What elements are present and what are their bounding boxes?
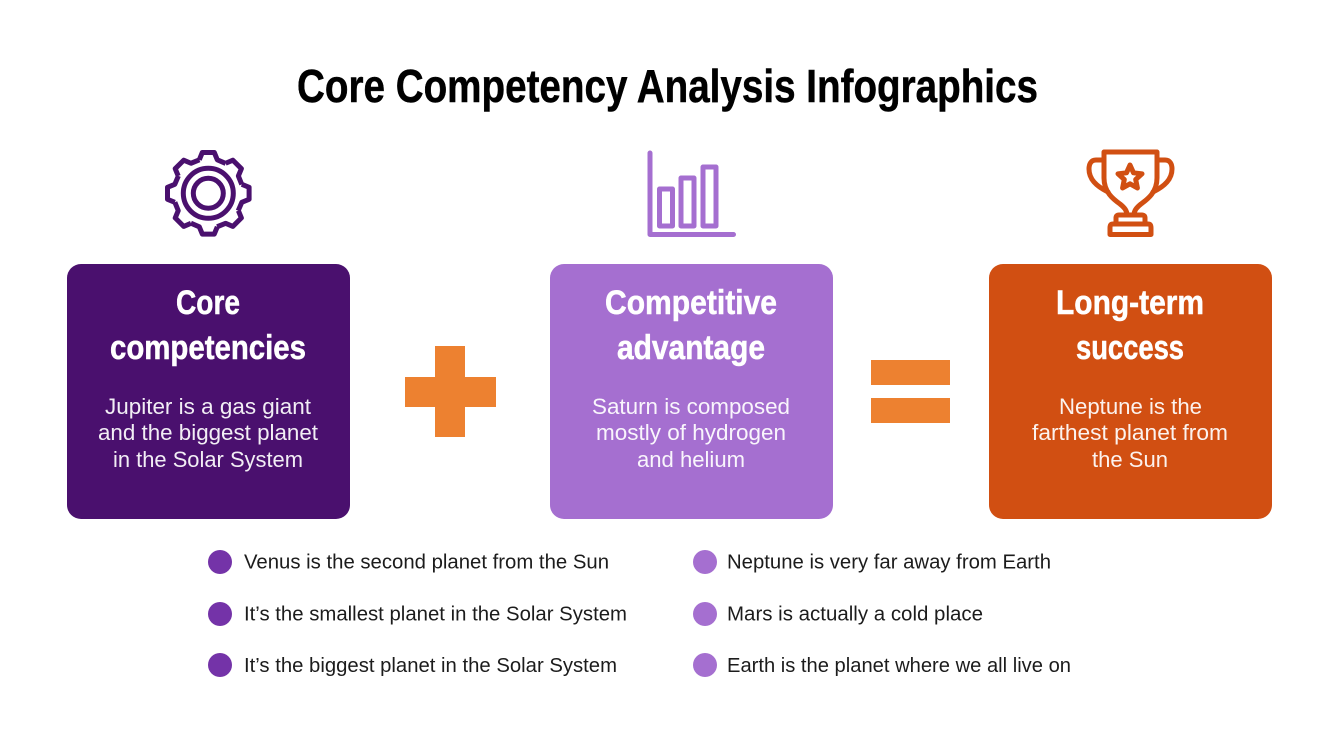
list item: biggest planet: It’s the biggest planet in the Solar System (244, 655, 617, 677)
heading: core competencies: competencies (110, 329, 306, 367)
list item: smallest planet: It’s the smallest planet in the Solar System (244, 604, 627, 626)
text: long-term success description: Neptune is the (1059, 394, 1202, 419)
heading: competitive advantage: Competitive (605, 284, 777, 322)
heading: core competencies (110, 284, 306, 367)
text: long-term success description (1032, 394, 1228, 472)
text: long-term success description: the Sun (1092, 447, 1168, 472)
text: long-term success description: farthest planet from (1032, 420, 1228, 445)
heading: long-term success: Long-term (1056, 284, 1204, 322)
heading: long-term success: success (1076, 329, 1184, 367)
text: core competencies description (98, 394, 318, 472)
text: competitive advantage description: and helium (637, 447, 745, 472)
text: competitive advantage description (592, 394, 790, 472)
list item: Venus: Venus is the second planet from the Sun (244, 552, 609, 574)
text: core competencies description: in the Solar System (113, 447, 303, 472)
text: core competencies description: and the biggest planet (98, 420, 318, 445)
heading: long-term success (1056, 284, 1204, 367)
panel: core competencies (67, 264, 350, 519)
panel: long-term success (989, 264, 1272, 519)
text: competitive advantage description: mostly of hydrogen (596, 420, 786, 445)
text: competitive advantage description: Saturn is composed (592, 394, 790, 419)
panel: competitive advantage (550, 264, 833, 519)
icon: equals (871, 360, 950, 423)
list: left column (208, 550, 627, 677)
title: Core Competency Analysis Infographics (297, 60, 1038, 112)
icon: bar chart (650, 153, 734, 234)
text: core competencies description: Jupiter is a gas giant (105, 394, 311, 419)
heading: competitive advantage: advantage (617, 329, 765, 367)
heading: competitive advantage (605, 284, 777, 367)
list item: Neptune: Neptune is very far away from Earth (727, 552, 1051, 574)
icon: gear (167, 152, 249, 234)
icon: plus (405, 346, 496, 437)
list item: Earth: Earth is the planet where we all live on (727, 655, 1071, 677)
icon: trophy (1089, 152, 1172, 234)
list: right column (693, 550, 1071, 677)
heading: core competencies: Core (176, 284, 240, 322)
list item: Mars: Mars is actually a cold place (727, 604, 983, 626)
